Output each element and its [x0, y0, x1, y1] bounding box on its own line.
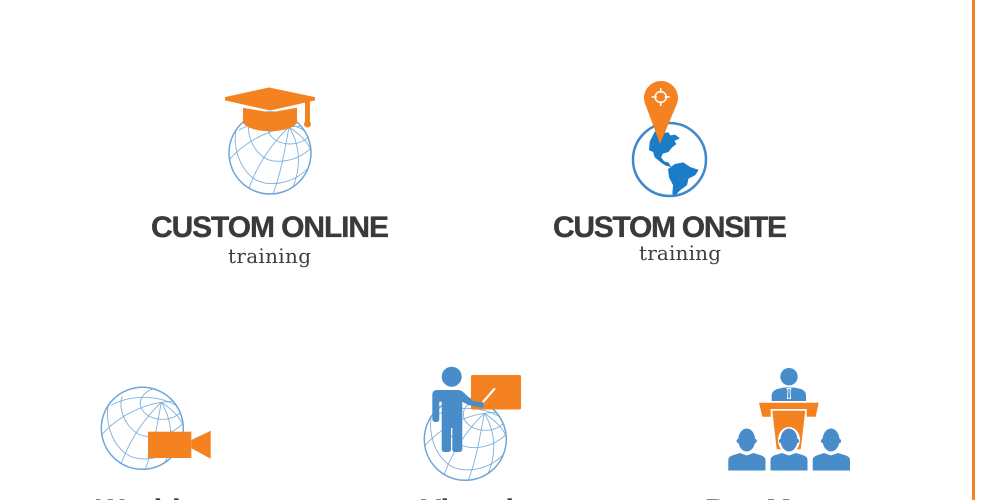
icon: globe with graduation cap: [226, 88, 314, 194]
subheading: training: training: [639, 241, 721, 265]
icon: globe with video camera: [101, 387, 211, 469]
panel: custom onsite training: [553, 81, 787, 265]
subheading: training: training: [228, 244, 311, 268]
heading: custom online: CUSTOM ONLINE: [151, 211, 389, 244]
icon: presenter with board and globe: [424, 367, 521, 480]
vertical orange rule: [972, 0, 975, 500]
panel: world: [96, 387, 211, 500]
icon: globe with location pin: [633, 81, 706, 196]
icon: speaker at podium with audience: [728, 368, 850, 470]
heading: custom onsite: CUSTOM ONSITE: [553, 211, 787, 244]
panel: peer mentor: [705, 368, 866, 500]
panel: virtual: [421, 367, 521, 500]
panel: custom online training: [151, 88, 389, 268]
